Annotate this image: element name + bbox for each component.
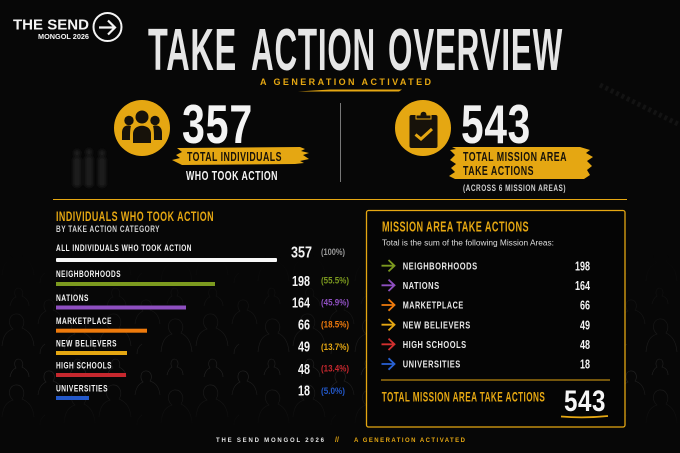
row: neighborhoods: 198 — [575, 260, 590, 274]
title: TAKE — [148, 17, 237, 83]
divider — [340, 103, 341, 182]
row: nations: NATIONS — [403, 281, 440, 292]
row: marketplace: 66 — [580, 299, 590, 313]
panel frame — [366, 210, 625, 427]
subtitle underline brush — [298, 90, 402, 92]
row: nations — [382, 279, 590, 293]
row: new believers — [56, 338, 349, 356]
stat: total mission area take actions — [395, 93, 593, 193]
brush label: TOTAL MISSION AREA — [463, 149, 567, 164]
row: universities — [382, 358, 590, 372]
row: marketplace: (18.5%) — [321, 320, 349, 331]
row: nations: NATIONS — [56, 293, 89, 303]
icon: people — [114, 100, 170, 156]
number 543: 543 — [461, 93, 531, 155]
row: all individuals — [56, 243, 345, 262]
row: neighborhoods: (55.5%) — [321, 276, 349, 287]
total number: 543 — [564, 385, 606, 418]
row: new believers: 49 — [298, 339, 310, 356]
total underline — [561, 416, 608, 417]
subheading: BY TAKE ACTION CATEGORY — [56, 224, 160, 234]
row: high schools: (13.4%) — [321, 364, 349, 375]
row: marketplace: MARKETPLACE — [56, 316, 112, 326]
row: high schools — [382, 338, 590, 352]
heading: INDIVIDUALS WHO TOOK ACTION — [56, 208, 214, 224]
row: neighborhoods — [56, 269, 349, 290]
row: universities — [56, 383, 345, 400]
heading: MISSION AREA TAKE ACTIONS — [382, 220, 529, 236]
row: marketplace: 66 — [298, 316, 310, 334]
row: new believers: NEW BELIEVERS — [56, 338, 117, 348]
total rule — [381, 380, 610, 381]
title: ACTION — [251, 17, 376, 83]
number 357: 357 — [182, 93, 253, 155]
row: universities: UNIVERSITIES — [403, 360, 461, 371]
brush label — [449, 147, 593, 179]
row: neighborhoods: NEIGHBORHOODS — [56, 269, 121, 279]
row: all individuals: ALL INDIVIDUALS WHO TOOK ACTION — [56, 243, 192, 253]
row: all individuals: (100%) — [321, 247, 345, 258]
logo: MONGOL 2026 — [38, 34, 89, 41]
row: high schools: 48 — [580, 338, 590, 352]
caption: (ACROSS 6 MISSION AREAS) — [463, 183, 566, 193]
row: new believers — [382, 318, 590, 332]
row: new believers: 49 — [580, 318, 590, 332]
background — [2, 83, 678, 414]
row: new believers: NEW BELIEVERS — [403, 320, 471, 331]
row: marketplace — [382, 299, 590, 313]
footer: // — [335, 437, 339, 444]
panel: mission area take actions — [366, 210, 625, 427]
footer: A GENERATION ACTIVATED — [354, 438, 466, 444]
total label: TOTAL MISSION AREA TAKE ACTIONS — [382, 388, 545, 404]
row: high schools: HIGH SCHOOLS — [56, 361, 112, 371]
row: marketplace: MARKETPLACE — [403, 301, 464, 312]
logo — [13, 13, 122, 41]
row: all individuals: 357 — [291, 244, 312, 262]
intro text: Total is the sum of the following Mission Areas: — [382, 238, 554, 248]
row: universities: 18 — [580, 358, 590, 372]
row: universities: 18 — [298, 383, 310, 400]
row: new believers: (13.7%) — [321, 342, 349, 353]
brush label — [172, 147, 309, 165]
row: nations — [56, 293, 349, 312]
row: neighborhoods — [382, 260, 590, 274]
title — [148, 17, 563, 83]
section rule — [53, 199, 627, 200]
panel: individuals who took action — [56, 208, 349, 400]
caption: WHO TOOK ACTION — [186, 168, 278, 183]
row: nations: 164 — [575, 279, 590, 293]
row: nations: (45.9%) — [321, 297, 349, 308]
logo: THE SEND — [13, 16, 89, 34]
row: neighborhoods: 198 — [292, 273, 310, 290]
footer — [216, 437, 466, 444]
row: universities: (5.0%) — [321, 386, 345, 397]
row: neighborhoods: NEIGHBORHOODS — [403, 262, 478, 272]
row: marketplace — [56, 316, 349, 334]
brush label: TOTAL INDIVIDUALS — [187, 149, 282, 164]
row: high schools — [56, 361, 349, 378]
stat: total individuals — [114, 93, 309, 183]
subtitle: A GENERATION ACTIVATED — [260, 77, 432, 87]
row: universities: UNIVERSITIES — [56, 384, 108, 394]
row: high schools: HIGH SCHOOLS — [403, 340, 467, 351]
brush label: TAKE ACTIONS — [463, 163, 534, 178]
row: nations: 164 — [292, 294, 310, 312]
row: high schools: 48 — [298, 361, 310, 378]
icon: clipboard — [395, 100, 451, 156]
footer: THE SEND MONGOL 2026 — [216, 438, 325, 444]
